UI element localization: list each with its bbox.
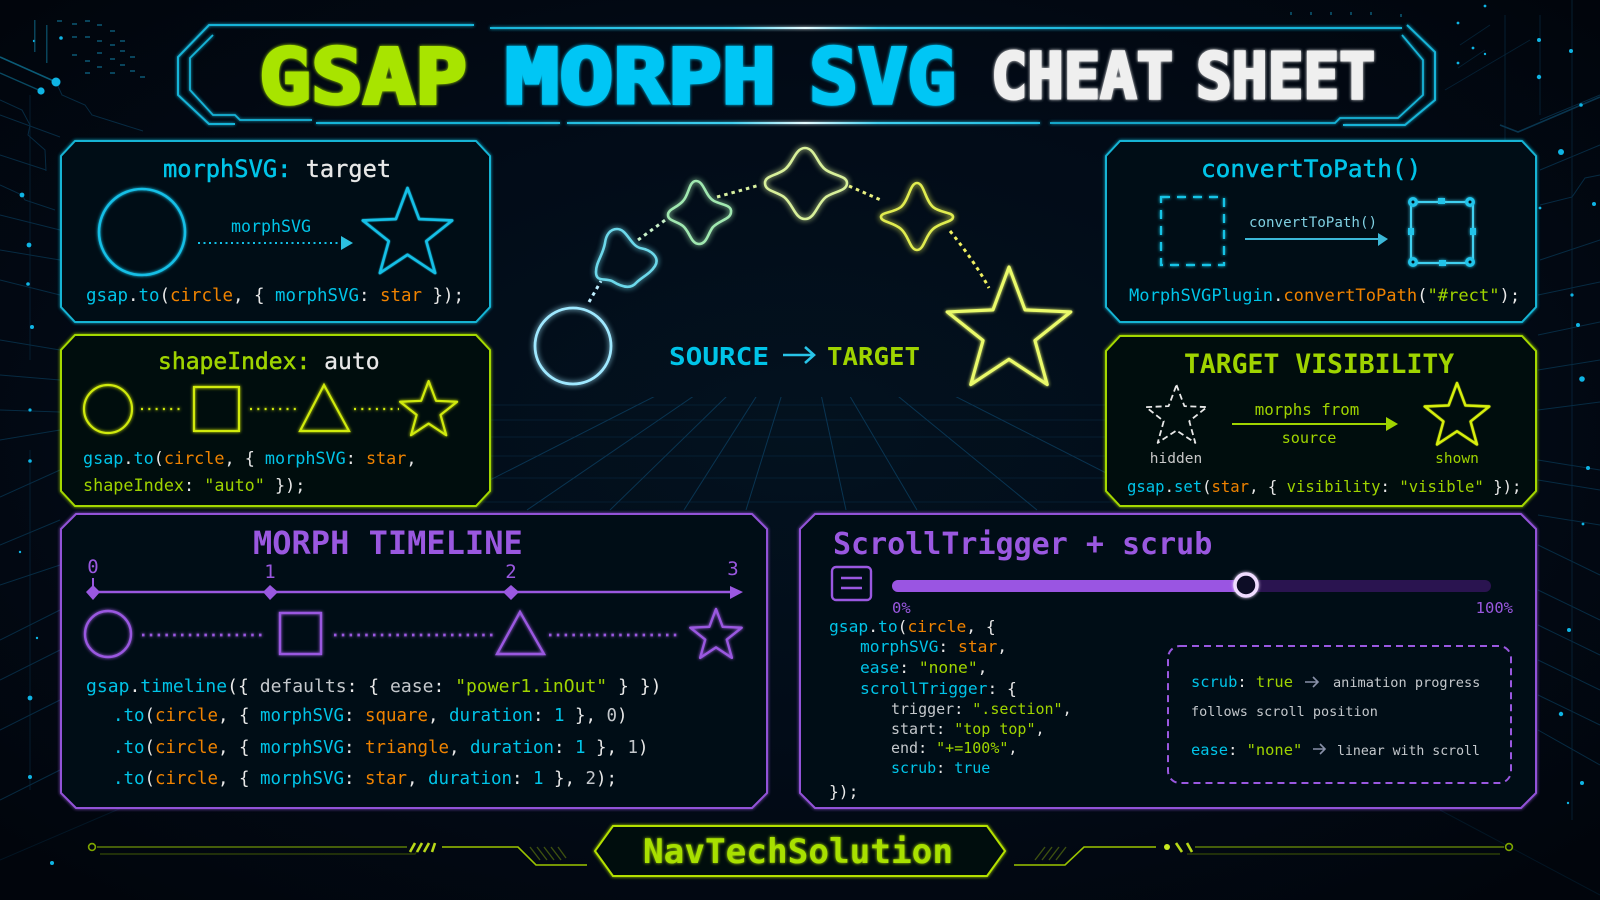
panel: morph timeline (61, 514, 767, 808)
icon: source circle (535, 308, 611, 384)
panel: target visibility (1106, 336, 1536, 506)
callout: scrub notes: follows scroll position (1191, 704, 1378, 720)
panel: convertToPath (1106, 141, 1536, 322)
code (86, 676, 661, 789)
timeline axis: 3 (727, 558, 739, 580)
arrow: morphSVG (198, 217, 353, 250)
code: trigger: ".section", (891, 700, 1072, 718)
arrow: morphs from source: source (1282, 429, 1336, 447)
title frame (178, 25, 1435, 125)
arrow: convertToPath: convertToPath() (1249, 215, 1377, 231)
label: source to target: TARGET (827, 342, 920, 371)
morph step 1 (596, 229, 657, 287)
icon: target star (363, 188, 452, 273)
shape sequence (85, 609, 742, 658)
code: gsap.to(circle, { morphSVG: star, (83, 448, 416, 468)
code: gsap.set(star, { visibility: "visible" }); (1127, 478, 1521, 496)
code: gsap.to(circle, { morphSVG: star }); (86, 286, 464, 306)
icon: hidden star (1146, 385, 1207, 467)
icon: shown star (1425, 383, 1489, 467)
scrub slider (892, 574, 1514, 617)
arrow: morphs from source (1232, 400, 1398, 447)
arrow: morphs from source: morphs from (1255, 400, 1359, 419)
callout: scrub notes: scrub: true (1191, 673, 1293, 691)
title text: GSAP: GSAP (259, 32, 467, 121)
heading: TARGET VISIBILITY (1184, 349, 1454, 380)
panel: morphSVG target (61, 141, 490, 322)
code: .to(circle, { morphSVG: triangle, duration: 1 }, 1) (113, 738, 648, 758)
callout: scrub notes: ease: "none" (1191, 741, 1302, 759)
panel: ScrollTrigger scrub (800, 514, 1536, 808)
scrub slider: 0% (892, 599, 911, 617)
icon: path rectangle with points (1408, 197, 1476, 267)
morph step 2 (668, 181, 731, 244)
morph step 3 (765, 148, 847, 219)
timeline axis (86, 556, 743, 600)
icon: shown star: shown (1435, 451, 1479, 467)
heading: shapeIndex: auto (158, 349, 380, 375)
code: ease: "none", (860, 658, 987, 677)
code: gsap.timeline({ defaults: { ease: "power1.inOut" } }) (86, 676, 661, 697)
label: source to target (669, 342, 920, 371)
shape sequence (84, 381, 457, 435)
dotted path (589, 185, 989, 302)
title banner (178, 25, 1435, 125)
heading: ScrollTrigger + scrub (833, 527, 1212, 562)
title text: MORPH: MORPH (505, 32, 776, 121)
code: start: "top top", (891, 720, 1045, 738)
scrub slider: 100% (1476, 599, 1514, 617)
icon: scroll box (832, 567, 871, 600)
callout: scrub notes: linear with scroll (1337, 744, 1480, 759)
callout: scrub notes (1168, 646, 1511, 783)
code: scrub: true (891, 759, 990, 777)
icon: hidden star: hidden (1150, 451, 1202, 467)
arrow: convertToPath (1245, 215, 1388, 246)
decorative line: left (89, 843, 587, 865)
morph step 4 (881, 183, 953, 250)
brand name: NavTechSolution (643, 832, 953, 872)
code: shapeIndex: "auto" }); (83, 475, 305, 495)
title text: SVG: SVG (809, 32, 956, 121)
code: .to(circle, { morphSVG: square, duration: 1 }, 0) (113, 706, 628, 726)
code: gsap.to(circle, { (829, 617, 996, 636)
central morph sequence (535, 148, 1071, 385)
code: end: "+=100%", (891, 739, 1017, 757)
code: }); (829, 782, 858, 801)
callout: scrub notes: animation progress (1333, 675, 1480, 691)
title text: SHEET: SHEET (1196, 40, 1375, 113)
heading: MORPH TIMELINE (253, 524, 523, 562)
code: MorphSVGPlugin.convertToPath("#rect"); (1129, 286, 1520, 306)
title text: CHEAT: CHEAT (991, 40, 1173, 113)
timeline axis: 0 (87, 556, 99, 578)
code: morphSVG: star, (860, 637, 1007, 656)
footer brand (89, 826, 1512, 876)
code (829, 617, 1072, 801)
timeline axis: 2 (505, 561, 517, 583)
timeline axis: 1 (264, 561, 276, 583)
code: .to(circle, { morphSVG: star, duration: 1 }, 2); (113, 769, 617, 789)
icon: target star (947, 267, 1071, 385)
brand plate (595, 826, 1005, 876)
heading: morphSVG: target (163, 155, 391, 183)
code (83, 448, 416, 495)
icon: dashed rectangle (1161, 197, 1224, 265)
arrow: morphSVG: morphSVG (231, 217, 311, 236)
decorative line: right (1014, 843, 1512, 865)
label: source to target: SOURCE (669, 342, 769, 371)
code: scrollTrigger: { (860, 679, 1017, 698)
heading: convertToPath() (1201, 154, 1421, 183)
panel: shapeIndex (61, 335, 490, 506)
icon: source circle (99, 189, 185, 275)
